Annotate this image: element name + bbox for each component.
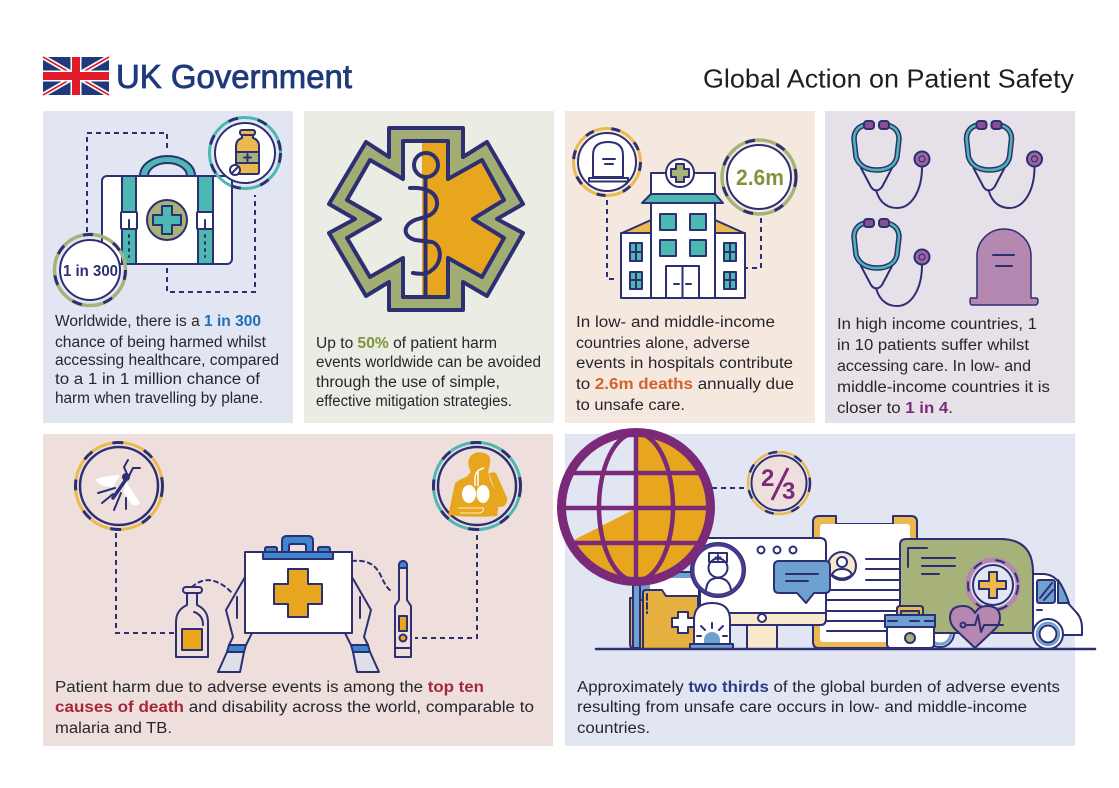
icon: toolbox <box>885 606 935 648</box>
dashed connectors <box>87 133 255 292</box>
logo text: UK Government <box>116 59 353 96</box>
icon: globe <box>561 432 711 582</box>
panel: two thirds burden <box>561 432 1095 746</box>
text block: to unsafe care. <box>576 397 685 414</box>
text block <box>55 679 534 737</box>
text block: malaria and TB. <box>55 720 172 737</box>
icon: lungs circle <box>434 442 520 530</box>
icon: hospital <box>621 159 745 298</box>
text block: resulting from unsafe care occurs in low- and middle-income <box>577 699 1027 716</box>
icon: stethoscope 1 <box>854 121 930 208</box>
text block: events worldwide can be avoided <box>316 354 541 371</box>
dashed connectors <box>116 533 477 638</box>
text block: accessing care. In low- and <box>837 358 1031 375</box>
text block: harm when travelling by plane. <box>55 390 263 407</box>
icon: mosquito circle <box>76 442 162 530</box>
stat circle: two thirds <box>748 452 810 514</box>
panel: 1 in 10 vs 1 in 4 <box>825 111 1075 423</box>
text block: In low- and middle-income <box>576 314 775 331</box>
text block: effective mitigation strategies. <box>316 393 512 410</box>
icon: thermometer <box>395 561 411 657</box>
text block <box>55 313 279 407</box>
dashed connectors <box>607 200 761 279</box>
icon: first aid briefcase <box>102 156 232 264</box>
text block <box>576 314 794 414</box>
icon: nurse <box>690 542 746 598</box>
icon: star of life <box>329 128 523 310</box>
text block: to 2.6m deaths annually due <box>576 376 794 393</box>
logo: UK Government <box>43 57 353 96</box>
text block: accessing healthcare, compared <box>55 352 279 369</box>
text block: Patient harm due to adverse events is among the top ten <box>55 679 484 696</box>
stat circle: two thirds: 2 <box>761 465 774 492</box>
icon: heart with pulse <box>950 606 1003 648</box>
dashed connector <box>712 487 747 489</box>
icon: stethoscope 3 <box>854 219 930 306</box>
stat circle: two thirds: 3 <box>782 478 795 505</box>
icon: alarm siren <box>690 603 733 649</box>
text block <box>316 335 541 410</box>
icon: computer monitor with chat <box>699 538 830 649</box>
text block: causes of death and disability across the world, comparable to <box>55 699 534 716</box>
text block: chance of being harmed whilst <box>55 334 267 351</box>
icon: bottle <box>176 587 208 657</box>
title: Global Action on Patient Safety <box>703 64 1074 94</box>
text block <box>837 316 1050 417</box>
text block <box>577 679 1060 737</box>
icon: gravestone circle <box>574 128 640 196</box>
text block: middle-income countries it is <box>837 379 1050 396</box>
text block: to a 1 in 1 million chance of <box>55 371 261 388</box>
icon: gravestone <box>970 229 1038 305</box>
text block: Approximately two thirds of the global burden of adverse events <box>577 679 1060 696</box>
icon: clipboard with document <box>813 516 917 648</box>
icon: hands holding first aid kit <box>218 536 379 672</box>
icon: ambulance <box>900 539 1082 649</box>
panel: top ten causes of death <box>43 434 553 746</box>
text block: In high income countries, 1 <box>837 316 1037 333</box>
icon: medicine bottle circle <box>210 118 280 188</box>
stat circle: 2.6m <box>722 140 796 214</box>
stat circle: 2.6m: 2.6m <box>736 165 784 190</box>
text block: countries alone, adverse <box>576 335 750 352</box>
ground line <box>596 648 1095 650</box>
icon: tablet and folder <box>630 572 698 649</box>
icon: union flag <box>43 57 109 95</box>
panel: 1 in 300 <box>43 111 293 423</box>
text block: events in hospitals contribute <box>576 355 793 372</box>
text block: closer to 1 in 4. <box>837 400 953 417</box>
icon: stethoscope 2 <box>966 121 1042 208</box>
text block: through the use of simple, <box>316 374 500 391</box>
stat circle: 1 in 300 <box>54 234 126 306</box>
text block: in 10 patients suffer whilst <box>837 337 1030 354</box>
panel: 2.6m deaths <box>565 111 815 423</box>
text block: countries. <box>577 720 650 737</box>
text block: Worldwide, there is a 1 in 300 <box>55 313 261 330</box>
stat circle: 1 in 300: 1 in 300 <box>63 263 118 280</box>
panel: 50% avoidable <box>304 111 554 423</box>
text block: Up to 50% of patient harm <box>316 335 497 352</box>
